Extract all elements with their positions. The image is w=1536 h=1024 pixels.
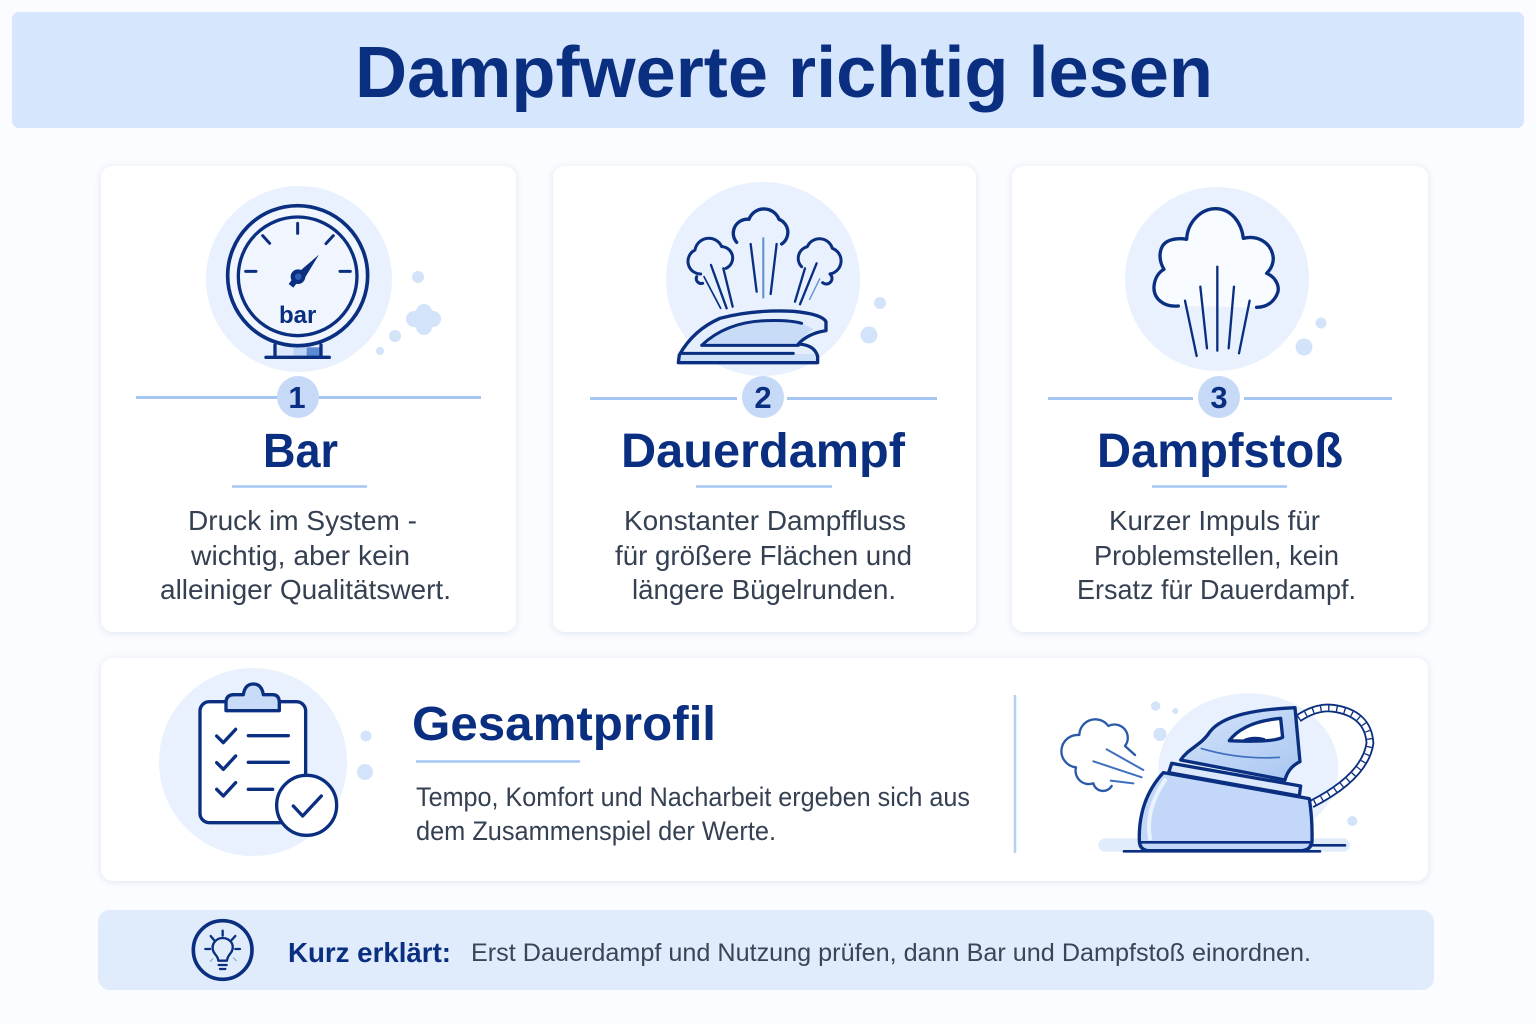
text: Dauerdampf description: Konstanter Dampffluss: [624, 505, 906, 536]
number divider 1: 1: [288, 380, 306, 415]
text: Bar description: alleiniger Qualitätswert.: [160, 574, 451, 605]
heading: Dampfstoß: Dampfstoß: [1097, 425, 1343, 478]
heading: Bar: Bar: [263, 425, 338, 478]
decorative steam bubbles: [860, 297, 886, 344]
decorative steam bubbles: [376, 271, 441, 355]
number divider 2: 2: [754, 380, 772, 415]
text: Dauerdampf description: längere Bügelrunden.: [632, 574, 896, 605]
text: Dampfstoß description: [1077, 505, 1356, 605]
number divider 2: [590, 376, 937, 418]
panel: Bar: [101, 166, 516, 632]
text: Dauerdampf description: für größere Flächen und: [615, 540, 912, 571]
number divider 3: 3: [1210, 380, 1228, 415]
icon: pressure gauge: bar: [279, 302, 316, 329]
icon: clipboard checklist: [159, 668, 347, 856]
steam puff: [1061, 719, 1143, 791]
number divider 1: [136, 376, 481, 418]
decorative steam bubbles: [1296, 318, 1326, 356]
panel: Dauerdampf: [553, 166, 976, 632]
text: Gesamtprofil description: Tempo, Komfort und Nacharbeit ergeben sich aus: [416, 782, 970, 812]
text: Bar description: [160, 505, 451, 605]
header banner: [12, 12, 1524, 128]
icon: steam burst cloud: [1125, 187, 1309, 371]
panel: Gesamtprofil: [101, 658, 1428, 881]
text: Dauerdampf description: [615, 505, 912, 605]
text: Kurz erklärt label: Kurz erklärt:: [288, 937, 451, 968]
text: Gesamtprofil description: dem Zusammenspiel der Werte.: [416, 816, 776, 846]
number divider 3: [1048, 376, 1392, 418]
icon: iron soleplate with three steam clouds: [666, 182, 860, 376]
text: tip message: Erst Dauerdampf und Nutzung prüfen, dann Bar und Dampfstoß einordnen.: [471, 939, 1311, 967]
panel: Dampfstoß: [1012, 166, 1428, 632]
text: Gesamtprofil description: [416, 782, 970, 846]
decorative steam bubbles: [357, 730, 373, 780]
heading: Dauerdampf: Dauerdampf: [621, 425, 906, 478]
text: Dampfstoß description: Problemstellen, kein: [1094, 540, 1339, 571]
icon: light bulb: [193, 921, 252, 979]
text: Bar description: Druck im System -: [188, 505, 417, 536]
text: Dampfstoß description: Ersatz für Dauerdampf.: [1077, 574, 1356, 605]
icon: steam generator iron: [1061, 693, 1370, 852]
heading: Gesamtprofil: Gesamtprofil: [412, 698, 716, 751]
title: Dampfwerte richtig lesen: [355, 33, 1213, 113]
panel: Kurz erklärt tip bar: [98, 910, 1434, 990]
text: Bar description: wichtig, aber kein: [190, 540, 410, 571]
text: Dampfstoß description: Kurzer Impuls für: [1109, 505, 1320, 536]
icon: pressure gauge: [206, 186, 392, 372]
